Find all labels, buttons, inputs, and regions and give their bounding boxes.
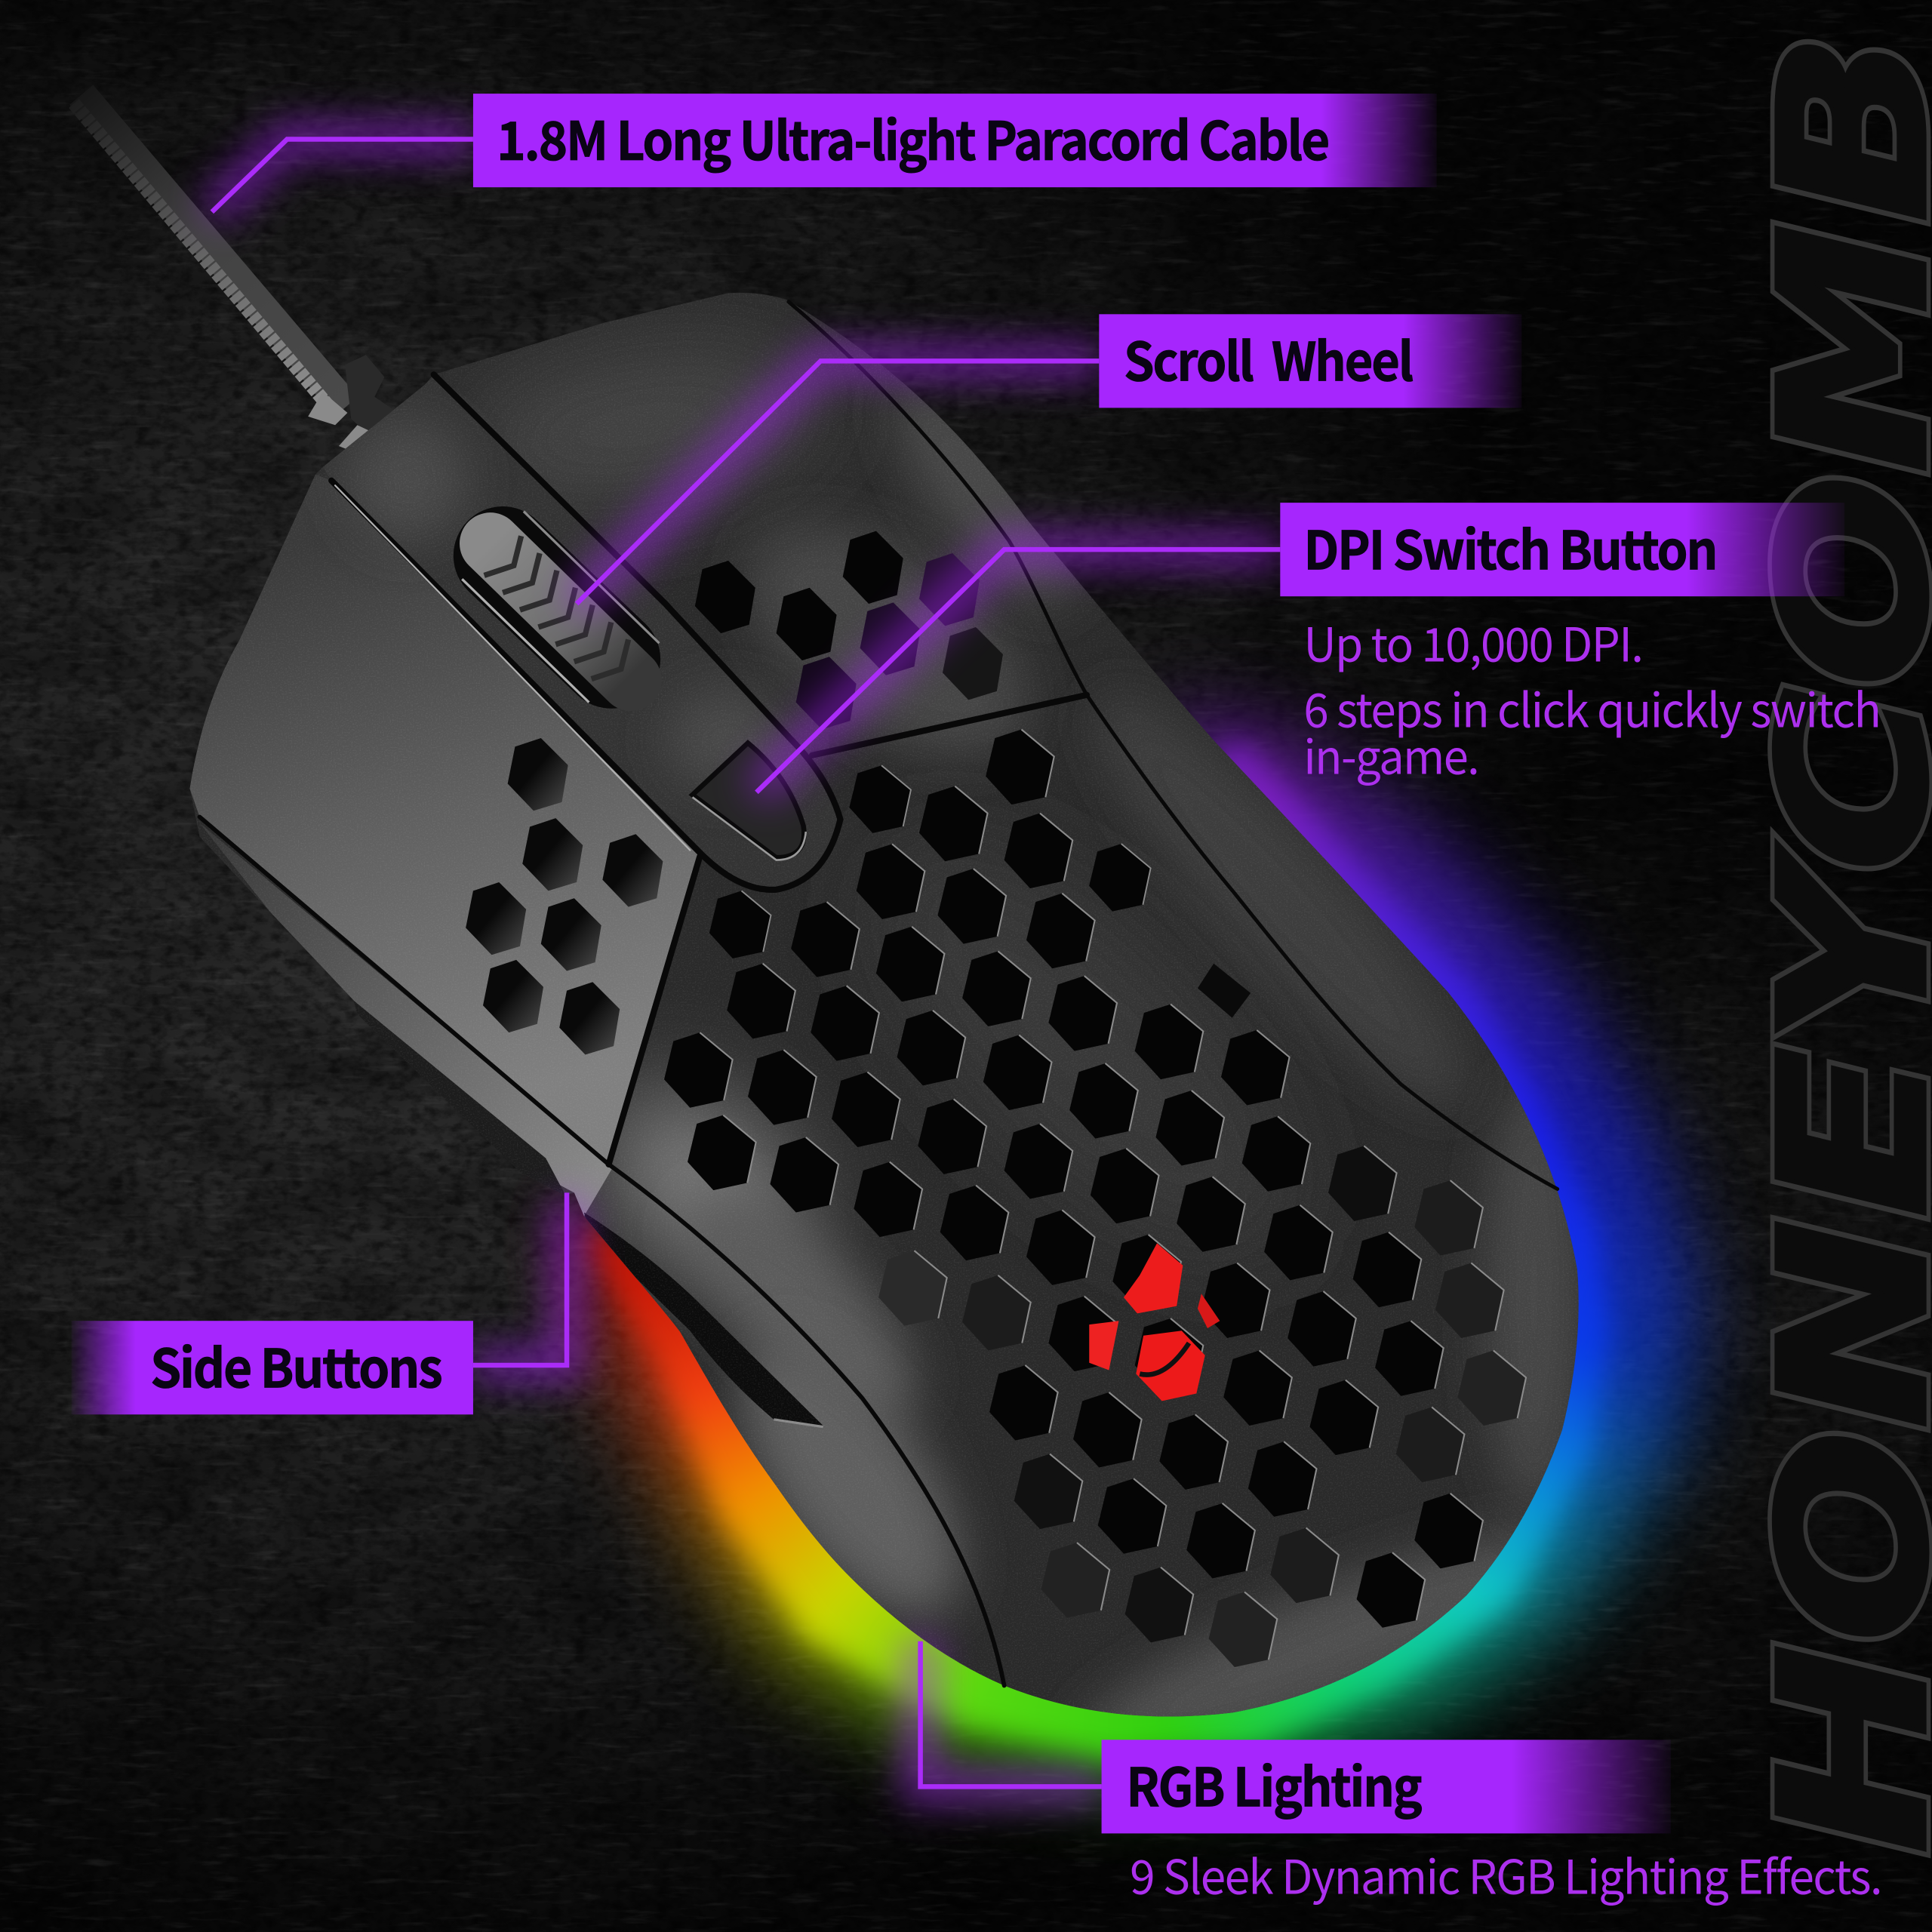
label: DPI switch button: DPI Switch Button [1303, 509, 1716, 585]
strip below left button [199, 823, 612, 1216]
callout leader glows [212, 139, 1280, 1786]
mouse body [123, 139, 1663, 1798]
honeycomb holes: palm shell [664, 730, 1526, 1667]
leader: cable [212, 139, 473, 212]
label: scroll wheel: Scroll Wheel [1124, 320, 1413, 396]
label: RGB lighting [1102, 1740, 1671, 1833]
leader: scroll wheel [577, 361, 1099, 604]
DPI description text: Up to 10,000 DPI. [1303, 608, 1642, 675]
left button panel [189, 475, 700, 1164]
honeycomb holes: front right group [695, 531, 1003, 730]
DPI description text [1303, 608, 1880, 787]
red logo seen through holes [1089, 1243, 1220, 1401]
seam lines [199, 302, 1558, 1685]
leader: DPI button [756, 549, 1280, 792]
leader: RGB lighting [921, 1641, 1102, 1786]
label: scroll wheel [1099, 314, 1521, 408]
RGB description text: 9 Sleek Dynamic RGB Lighting Effects. [1130, 1839, 1881, 1907]
leader: side buttons [473, 1192, 567, 1365]
wheel strip [323, 374, 840, 890]
label: DPI switch button [1280, 503, 1844, 596]
cable: braided paracord with strain relief [74, 95, 407, 454]
side button [354, 1001, 567, 1198]
label: paracord cable: 1.8M Long Ultra-light Paracord Cable [497, 100, 1328, 176]
honeycomb holes: left button group [466, 738, 663, 1055]
thumb groove [584, 1213, 823, 1426]
body shading [446, 320, 1603, 1798]
label: side buttons [72, 1321, 473, 1414]
DPI description text: 6 steps in click quickly switch [1303, 672, 1880, 740]
DPI description text: in-game. [1303, 719, 1478, 787]
label: side buttons: Side Buttons [150, 1327, 441, 1403]
RGB lighting: bright inner glow [574, 729, 1625, 1777]
RGB lighting: wide outer glow [542, 670, 1746, 1835]
scroll wheel [462, 512, 659, 703]
label: RGB lighting: RGB Lighting [1126, 1746, 1422, 1822]
DPI switch button [693, 743, 806, 860]
